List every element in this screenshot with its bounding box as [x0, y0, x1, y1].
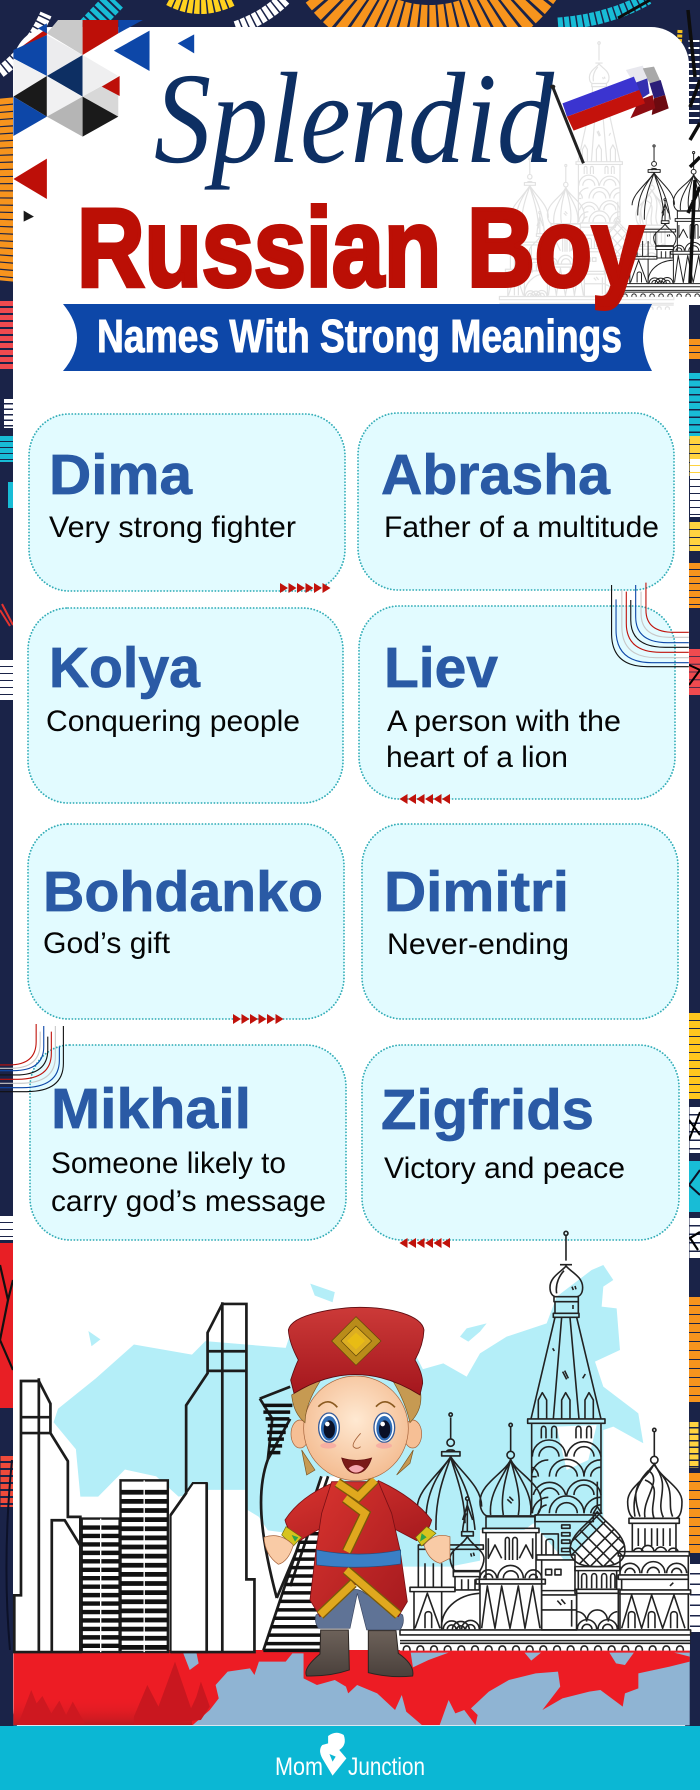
- arrows: red chevrons left, Zigfrids: [400, 1238, 450, 1248]
- eyebrows: [318, 1402, 395, 1407]
- geometric triangle mosaic: [13, 20, 194, 222]
- card: Liev: [359, 606, 675, 799]
- icon: mother and child: [320, 1733, 346, 1776]
- card: Zigfrids: Victory and peace: [384, 1152, 625, 1185]
- collar and gold trim: [320, 1480, 398, 1615]
- card: Abrasha: [358, 413, 674, 590]
- subtitle banner: [63, 304, 652, 371]
- card: Abrasha: Father of a multitude: [384, 511, 659, 544]
- card: Mikhail: Someone likely to: [51, 1147, 286, 1180]
- arrows: red chevrons left, Liev: [400, 794, 450, 804]
- hair front: [292, 1377, 421, 1423]
- card: Liev: Liev: [384, 636, 498, 700]
- cuffs: [282, 1527, 436, 1546]
- MomJunction logo: [275, 1733, 425, 1781]
- ghost church outline: [499, 42, 674, 310]
- card: Kolya: Conquering people: [46, 705, 300, 738]
- title: Splendid: Splendid: [154, 47, 555, 191]
- card: Mikhail: carry god’s message: [51, 1185, 326, 1218]
- card: Abrasha: Abrasha: [381, 443, 611, 507]
- MomJunction logo: Junction: [348, 1753, 425, 1781]
- icon: Russian flag: [550, 66, 669, 163]
- card: Bohdanko: God’s gift: [43, 927, 171, 960]
- St Basil's Cathedral: [400, 1231, 691, 1651]
- map of Russia, sky tint: [54, 1265, 643, 1567]
- card: Dima: Dima: [49, 443, 193, 507]
- card: Dima: Very strong fighter: [49, 511, 296, 544]
- card: Bohdanko: [28, 824, 344, 1019]
- card: Bohdanko: Bohdanko: [43, 860, 323, 924]
- decorative wires left: [0, 1024, 63, 1092]
- black branches top right: [688, 10, 700, 283]
- arrows: red chevrons right, Dima: [280, 583, 330, 593]
- hair back: [302, 1450, 413, 1475]
- skyline: Moscow towers: [14, 1302, 339, 1652]
- coat: [310, 1482, 407, 1617]
- decorative wires right: [612, 583, 689, 667]
- card: Mikhail: [30, 1045, 346, 1240]
- ground: sea and red land map: [13, 1650, 690, 1725]
- arrows: red chevrons right, Bohdanko: [233, 1014, 284, 1024]
- card: Dimitri: Never-ending: [387, 928, 569, 961]
- face: [304, 1376, 408, 1481]
- card: Kolya: Kolya: [49, 636, 201, 700]
- MomJunction logo: Mom: [275, 1753, 323, 1781]
- footer bar: [0, 1726, 700, 1790]
- belt: [317, 1550, 401, 1567]
- card: Kolya: [28, 608, 343, 803]
- church illustration top right: [622, 144, 700, 297]
- boots: [306, 1630, 413, 1677]
- sleeves: [285, 1481, 432, 1541]
- trousers: [315, 1589, 403, 1630]
- cheeks and nose: [320, 1433, 392, 1449]
- boy in Russian costume: [264, 1307, 450, 1677]
- card: Mikhail: Mikhail: [51, 1077, 251, 1141]
- card: Dima: [29, 414, 345, 591]
- hat: [288, 1307, 424, 1395]
- hat diamond: [332, 1317, 381, 1365]
- card: Dimitri: Dimitri: [384, 860, 569, 924]
- card: Liev: A person with the: [387, 705, 621, 738]
- hands: [264, 1535, 450, 1564]
- card: Liev: heart of a lion: [386, 741, 568, 774]
- eyes: [319, 1413, 395, 1442]
- card: Zigfrids: [362, 1045, 679, 1240]
- ears: [291, 1420, 309, 1448]
- card: Dimitri: [362, 824, 678, 1019]
- card: Zigfrids: Zigfrids: [381, 1078, 594, 1142]
- mouth: [342, 1458, 372, 1473]
